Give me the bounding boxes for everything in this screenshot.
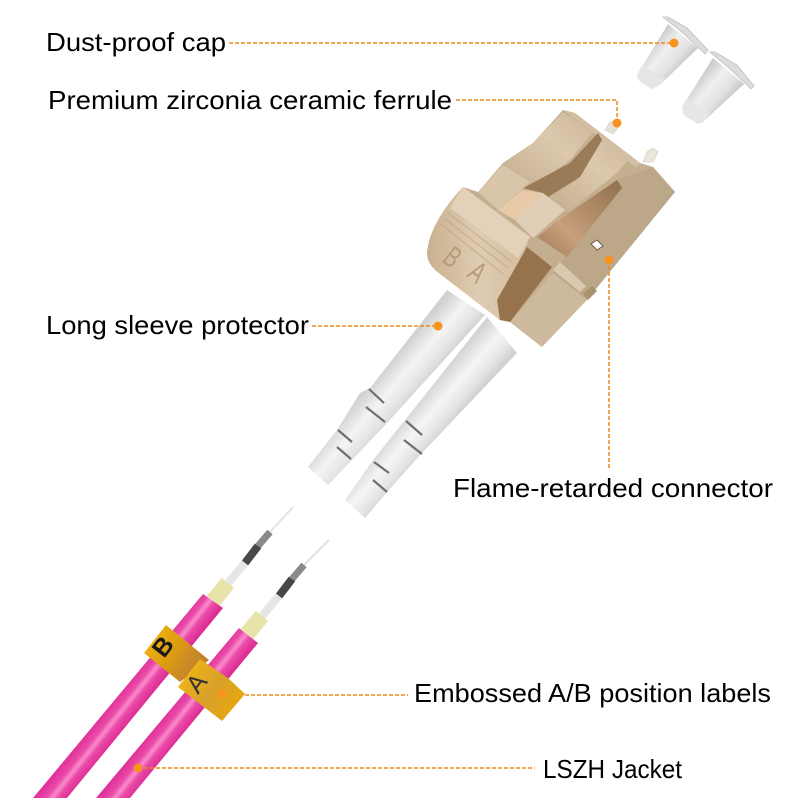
- icon: dust-proof caps: [637, 17, 754, 124]
- icon: ferrules: [605, 120, 658, 162]
- callout: flame-retarded connector: Flame-retarded connector: [453, 473, 773, 503]
- callout: dust-proof cap: [46, 27, 678, 57]
- latch window: [591, 240, 603, 250]
- lower block: [510, 273, 587, 347]
- groove: [523, 133, 602, 197]
- side tab: [583, 286, 597, 300]
- icon: position label A: [178, 659, 245, 721]
- icon: position label A: A: [181, 668, 213, 699]
- letters B A: [437, 241, 492, 290]
- icon: long sleeve protectors: [308, 290, 517, 518]
- latch left: [503, 112, 593, 190]
- callout: LSZH jacket: [134, 754, 683, 784]
- callout: long sleeve protector: [46, 310, 442, 340]
- icon: LC duplex connector: [427, 110, 675, 347]
- latch top rim: [563, 110, 640, 168]
- latch right: [550, 138, 630, 213]
- body block: [553, 167, 675, 300]
- callout: ferrule: [48, 85, 622, 128]
- front cap: [427, 187, 530, 320]
- connector silhouette: [427, 110, 675, 347]
- callout: LSZH jacket: LSZH Jacket: [543, 754, 683, 784]
- callout: ferrule: Premium zirconia ceramic ferrule: [48, 85, 452, 115]
- icon: position label B: B: [147, 631, 180, 663]
- callout: long sleeve protector: Long sleeve protector: [46, 310, 309, 340]
- callout: embossed labels: Embossed A/B position labels: [414, 678, 771, 708]
- icon: position label B: [144, 625, 209, 682]
- letters B A: A: [462, 256, 492, 290]
- callout: embossed labels: [218, 678, 771, 708]
- icon: fibre cable B: [33, 507, 293, 798]
- arch cavity: [537, 180, 622, 257]
- callout: flame-retarded connector: [453, 256, 773, 503]
- icon: fibre cable A: [96, 540, 329, 798]
- inner cavity: [497, 247, 552, 322]
- callout: dust-proof cap: Dust-proof cap: [46, 27, 226, 57]
- latch tabs: [478, 165, 530, 210]
- letters B A: B: [437, 241, 467, 275]
